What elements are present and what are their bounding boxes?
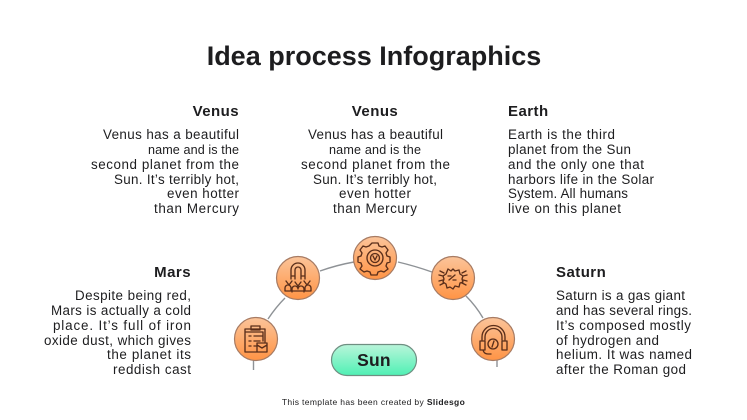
pill: Sun [332, 344, 416, 376]
body: Mars: oxide dust, which gives [44, 333, 191, 348]
body: Venus center: than Mercury [333, 201, 417, 216]
body: Venus left: name and is the [148, 143, 239, 157]
body: Venus left: than Mercury [154, 201, 239, 216]
body: Earth: and the only one that [508, 157, 644, 172]
body: Mars: the planet its [107, 347, 191, 362]
body: Venus center: Venus has a beautiful [308, 127, 443, 142]
body: Saturn: Saturn is a gas giant [556, 288, 685, 303]
body: Earth: live on this planet [508, 201, 621, 216]
text block: Saturn [556, 264, 692, 377]
text block: Mars [44, 264, 191, 377]
body: Saturn: helium. It was named [556, 347, 692, 362]
arc connector [254, 262, 497, 370]
body: Mars: place. It’s full of iron [53, 318, 191, 333]
body: Saturn [556, 288, 692, 377]
icon: headset [472, 318, 514, 360]
body: Venus left: Venus has a beautiful [103, 127, 239, 142]
body: Saturn: and has several rings. [556, 303, 692, 318]
body: Venus center: even hotter [339, 186, 412, 201]
body: Saturn: of hydrogen and [556, 333, 659, 348]
icon: magnet and team [276, 256, 320, 300]
body: Venus left: second planet from the [91, 157, 239, 172]
heading: Mars: Mars [154, 264, 191, 281]
body: Mars: Mars is actually a cold [51, 303, 191, 318]
body: Venus center: Sun. It’s terribly hot, [313, 172, 437, 187]
body: Saturn: after the Roman god [556, 362, 686, 377]
body: Venus center: name and is the [329, 143, 421, 157]
text block: Venus left [91, 103, 240, 216]
body: Venus left [91, 127, 240, 216]
body: Mars: Despite being red, [75, 288, 191, 303]
heading: Venus left: Venus [193, 103, 239, 120]
text block: Venus center [301, 103, 450, 216]
heading: Earth: Earth [508, 103, 549, 120]
body: Mars: reddish cast [113, 362, 191, 377]
body: Mars [44, 288, 191, 377]
body: Earth [508, 127, 655, 216]
body: Earth: System. All humans [508, 186, 628, 201]
pill: Sun: Sun [357, 350, 391, 370]
body: Saturn: It’s composed mostly [556, 318, 691, 333]
body: Earth: Earth is the third [508, 127, 615, 142]
body: Earth: planet from the Sun [508, 142, 631, 157]
title: Idea process Infographics [207, 41, 541, 71]
footer credit: This template has been created by Slidesgo [282, 397, 465, 407]
body: Earth: harbors life in the Solar [508, 172, 655, 187]
body: Venus center: second planet from the [301, 157, 450, 172]
text block: Earth [508, 103, 655, 216]
body: Venus center [301, 127, 450, 216]
body: Venus left: Sun. It’s terribly hot, [114, 172, 239, 187]
heading: Saturn: Saturn [556, 264, 606, 281]
body: Venus left: even hotter [167, 186, 240, 201]
icon: puzzle process [432, 256, 474, 300]
icon: gear [354, 236, 396, 280]
heading: Venus center: Venus [352, 103, 398, 120]
icon: clipboard [234, 318, 278, 360]
